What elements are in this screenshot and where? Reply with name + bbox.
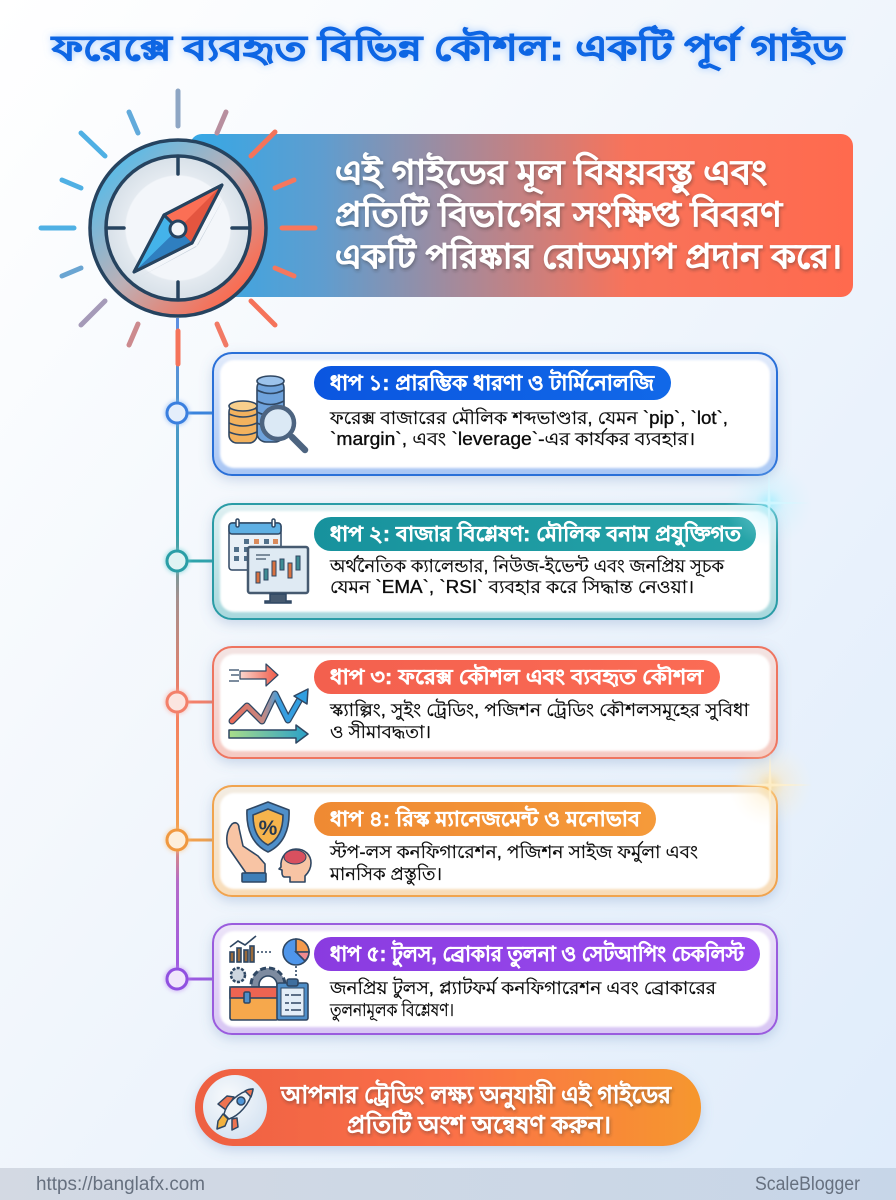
title: ফরেক্সে ব্যবহৃত বিভিন্ন কৌশল: একটি পূর্ণ গাইড: [50, 25, 845, 71]
icon: toolbox, gears, charts and checklist: [230, 936, 309, 1020]
step 1 heading: [314, 366, 671, 400]
call to action: [195, 1069, 701, 1146]
step 3 node: [165, 690, 189, 714]
step 2 heading: ধাপ ২: বাজার বিশ্লেষণ: মৌলিক বনাম প্রযুক্তিগত: [330, 521, 742, 547]
icon: trading arrows: [229, 664, 308, 743]
step 3 description: [329, 699, 750, 742]
step 4 description: স্টপ-লস কনফিগারেশন, পজিশন সাইজ ফর্মুলা এবং: [329, 841, 698, 862]
step 2 description: যেমন `EMA`, `RSI` ব্যবহার করে সিদ্ধান্ত নেওয়া।: [330, 577, 694, 597]
star glow: orange: [728, 743, 812, 827]
panel: step 3: [165, 647, 777, 758]
step 1 heading: ধাপ ১: প্রারম্ভিক ধারণা ও টার্মিনোলজি: [330, 369, 655, 395]
star glow: teal: [725, 459, 813, 547]
call to action text: প্রতিটি অংশ অন্বেষণ করুন।: [347, 1109, 611, 1139]
icon: compass with rays: [41, 91, 315, 364]
step 4 description: [329, 841, 698, 885]
step 5 description: জনপ্রিয় টুলস, প্ল্যাটফর্ম কনফিগারেশন এবং ব্রোকারের: [329, 977, 717, 998]
step 4 heading: ধাপ ৪: রিস্ক ম্যানেজমেন্ট ও মনোভাব: [330, 805, 641, 831]
timeline line: [176, 318, 179, 980]
step 5 description: তুলনামূলক বিশ্লেষণ।: [329, 1000, 454, 1021]
panel: step 5: [165, 924, 777, 1034]
panel: step 2: [165, 504, 777, 619]
step 2 node: [165, 549, 189, 573]
step 1 node: [165, 401, 189, 425]
step 4 description: মানসিক প্রস্তুতি।: [329, 864, 442, 885]
footer url: https://banglafx.com: [36, 1174, 205, 1195]
step 5 heading: [314, 937, 760, 971]
call to action text: [280, 1079, 672, 1139]
step 1 description: ফরেক্স বাজারের মৌলিক শব্দভাণ্ডার, যেমন `pip`, `lot`,: [329, 408, 728, 428]
step 2 description: অর্থনৈতিক ক্যালেন্ডার, নিউজ-ইভেন্ট এবং জনপ্রিয় সূচক: [329, 555, 724, 576]
panel: step 1: [165, 353, 777, 475]
icon: calendar and chart monitor: [229, 519, 308, 603]
footer bar: [0, 1168, 896, 1200]
step 4 heading: [314, 802, 656, 836]
step 3 heading: [314, 660, 720, 694]
panel: step 4: [165, 786, 777, 896]
step 1 description: [329, 408, 728, 449]
footer brand: ScaleBlogger: [755, 1174, 861, 1195]
icon: coins and magnifier: [229, 376, 305, 450]
banner text: এই গাইডের মূল বিষয়বস্তু এবং: [335, 152, 767, 195]
step 2 heading: [314, 517, 756, 551]
step 4 node: [165, 828, 189, 852]
icon: rocket: [203, 1075, 267, 1139]
icon: shield, hand and brain: [227, 802, 311, 882]
step 3 description: স্ক্যাল্পিং, সুইং ট্রেডিং, পজিশন ট্রেডিং কৌশলসমূহের সুবিধা: [329, 699, 750, 720]
step 3 description: ও সীমাবদ্ধতা।: [330, 721, 431, 742]
intro banner: [190, 134, 853, 297]
step 3 heading: ধাপ ৩: ফরেক্স কৌশল এবং ব্যবহৃত কৌশল: [330, 664, 704, 689]
icon: shield, hand and brain: %: [259, 817, 278, 840]
step 5 description: [329, 977, 717, 1021]
step 5 heading: ধাপ ৫: টুলস, ব্রোকার তুলনা ও সেটআপিং চেকলিস্ট: [330, 940, 745, 968]
banner text: একটি পরিষ্কার রোডম্যাপ প্রদান করে।: [335, 234, 842, 276]
step 5 node: [165, 967, 189, 991]
banner text: প্রতিটি বিভাগের সংক্ষিপ্ত বিবরণ: [335, 192, 784, 234]
banner text: [335, 152, 842, 276]
call to action text: আপনার ট্রেডিং লক্ষ্য অনুযায়ী এই গাইডের: [280, 1079, 672, 1110]
step 1 description: `margin`, এবং `leverage`-এর কার্যকর ব্যবহার।: [330, 428, 695, 449]
step 2 description: [329, 555, 724, 597]
